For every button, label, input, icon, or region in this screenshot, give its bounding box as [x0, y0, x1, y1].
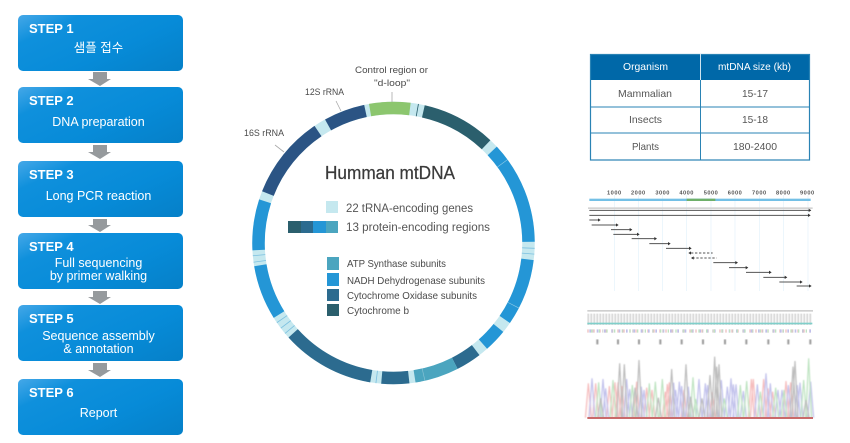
- primer walking map: 1000: [607, 191, 622, 197]
- step 3: [18, 161, 183, 217]
- ring labels: Control region or: [355, 65, 428, 76]
- legend: protein complexes: Cytochrome Oxidase subunits: [347, 290, 477, 302]
- ring labels: 12S rRNA: [305, 87, 345, 98]
- primer walking map: 2000: [631, 191, 646, 197]
- table: mtDNA size by organism: Mammalian: [618, 88, 672, 100]
- position ticks: [597, 339, 810, 344]
- leader lines: [275, 92, 392, 152]
- table: mtDNA size by organism: 15-17: [742, 88, 768, 100]
- table: mtDNA size by organism: 15-18: [742, 114, 768, 126]
- green traces: [596, 358, 812, 418]
- diagram title: Humman mtDNA: [325, 162, 456, 183]
- table: mtDNA size by organism: Insects: [629, 114, 662, 126]
- peak traces: [585, 357, 814, 418]
- legend: protein complexes: NADH Dehydrogenase subunits: [347, 275, 485, 287]
- step 4: by primer walking: [50, 269, 147, 283]
- step 2: STEP 2: [29, 93, 74, 108]
- ring labels: [244, 65, 428, 139]
- step 1: STEP 1: [29, 21, 74, 36]
- primer walking map: 3000: [655, 191, 670, 197]
- table: mtDNA size by organism: 180-2400: [733, 141, 777, 153]
- primer walking map: 9000: [800, 191, 815, 197]
- step 6: [18, 379, 183, 435]
- primer walking map: 8000: [776, 191, 791, 197]
- ring segments: [258, 108, 528, 378]
- step 2: [18, 87, 183, 143]
- table: mtDNA size by organism: mtDNA size (kb): [718, 61, 791, 73]
- primer walking map: 4000: [679, 191, 694, 197]
- step 3: Long PCR reaction: [46, 189, 151, 203]
- flow arrows between steps: [88, 72, 111, 377]
- legend: gene types: [288, 201, 490, 234]
- table: mtDNA size by organism: [590, 54, 810, 160]
- table: mtDNA size by organism: Organism: [623, 61, 668, 73]
- primer walking map: 5000: [704, 191, 718, 197]
- primer walking map: 7000: [752, 191, 767, 197]
- chromatogram baseline: [587, 417, 813, 419]
- table: mtDNA size by organism: Plants: [632, 141, 659, 153]
- legend: gene types: 13 protein-encoding regions: [346, 222, 490, 234]
- step 4: STEP 4: [29, 239, 74, 254]
- step 5: [18, 305, 183, 361]
- step 5: STEP 5: [29, 311, 74, 326]
- step 5: & annotation: [63, 342, 134, 356]
- step 5: Sequence assembly: [42, 329, 155, 343]
- step 1: [18, 15, 183, 71]
- legend: gene types: 22 tRNA-encoding genes: [346, 203, 473, 215]
- primer walking map: [588, 191, 815, 291]
- step 4: Full sequencing: [55, 256, 142, 270]
- sequencing chromatogram: [585, 310, 814, 419]
- legend: protein complexes: Cytochrome b: [347, 305, 409, 317]
- purple traces: [589, 373, 814, 418]
- primer walking map: 6000: [728, 191, 742, 197]
- ring labels: 16S rRNA: [244, 128, 285, 139]
- pink traces: [585, 379, 794, 418]
- ring labels: "d-loop": [374, 78, 410, 89]
- step 3: STEP 3: [29, 167, 74, 182]
- step 6: STEP 6: [29, 385, 74, 400]
- step 2: DNA preparation: [52, 115, 145, 129]
- step 4: [18, 233, 183, 289]
- legend: protein complexes: ATP Synthase subunits: [347, 258, 446, 270]
- legend: protein complexes: [327, 257, 485, 317]
- step 1: 샘플 접수: [74, 41, 123, 55]
- step 6: Report: [80, 406, 117, 420]
- base call row: [587, 326, 812, 336]
- gray traces: [598, 357, 809, 418]
